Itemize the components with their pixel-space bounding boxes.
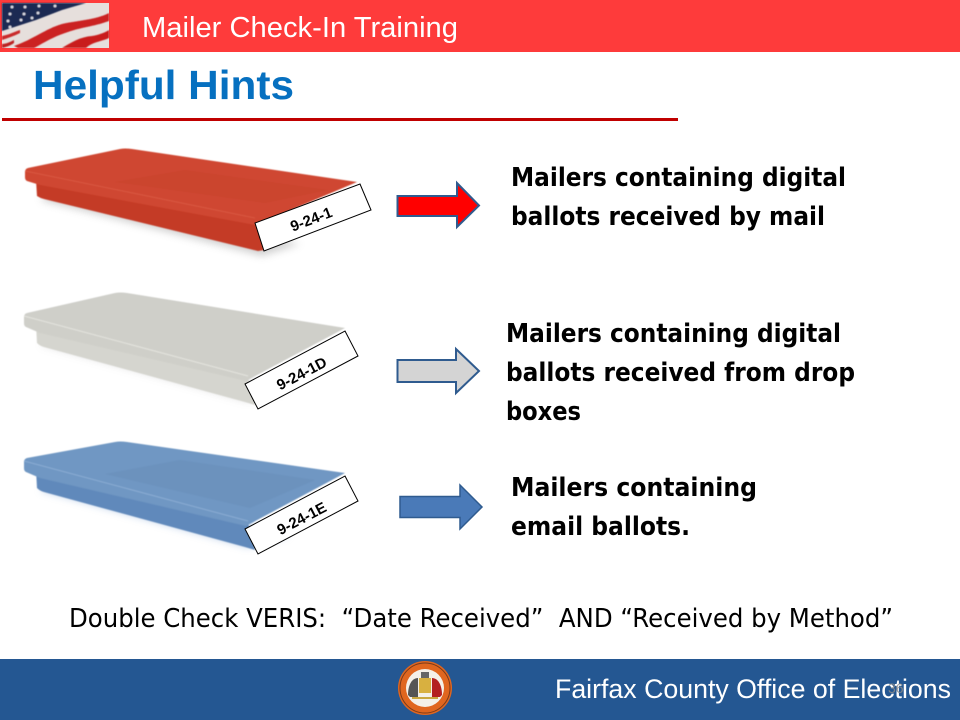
tray label: 9-24-1D: [274, 354, 330, 394]
tray label: 9-24-1E: [274, 499, 330, 539]
gray tray: [24, 292, 345, 405]
description: Mailers containing digital: [511, 163, 846, 193]
arrow: blue: [400, 485, 482, 529]
description: ballots received by mail: [511, 202, 825, 232]
description: email ballots.: [511, 512, 690, 542]
icon: American flag: [2, 3, 109, 48]
footer bar: [0, 659, 960, 720]
description: Mailers containing digital: [506, 319, 841, 349]
panel: blue tray row: [24, 442, 757, 554]
heading: Helpful Hints: [33, 62, 294, 108]
tray label: 9-24-1: [288, 204, 335, 236]
tray label: [245, 476, 358, 554]
panel: gray tray row: [24, 292, 855, 427]
description: [511, 163, 846, 232]
note text: Double Check VERIS: “Date Received” AND “Received by Method”: [69, 604, 893, 634]
footer text: Fairfax County Office of Elections: [555, 674, 951, 704]
description: boxes: [506, 397, 581, 427]
arrow: gray: [398, 349, 479, 393]
header title: Mailer Check-In Training: [142, 12, 458, 44]
blue tray: [24, 442, 345, 550]
description: Mailers containing: [511, 473, 757, 503]
description: [511, 473, 757, 542]
page number: 36: [888, 680, 904, 696]
description: ballots received from drop: [506, 358, 855, 388]
icon: county seal: [398, 661, 452, 715]
red tray: [25, 148, 357, 256]
tray label: [255, 184, 371, 251]
heading underline: [2, 118, 678, 121]
panel: red tray row: [25, 148, 846, 256]
description: [506, 319, 855, 427]
header bar: [0, 0, 960, 52]
arrow: red: [398, 183, 479, 227]
tray label: [245, 331, 358, 409]
